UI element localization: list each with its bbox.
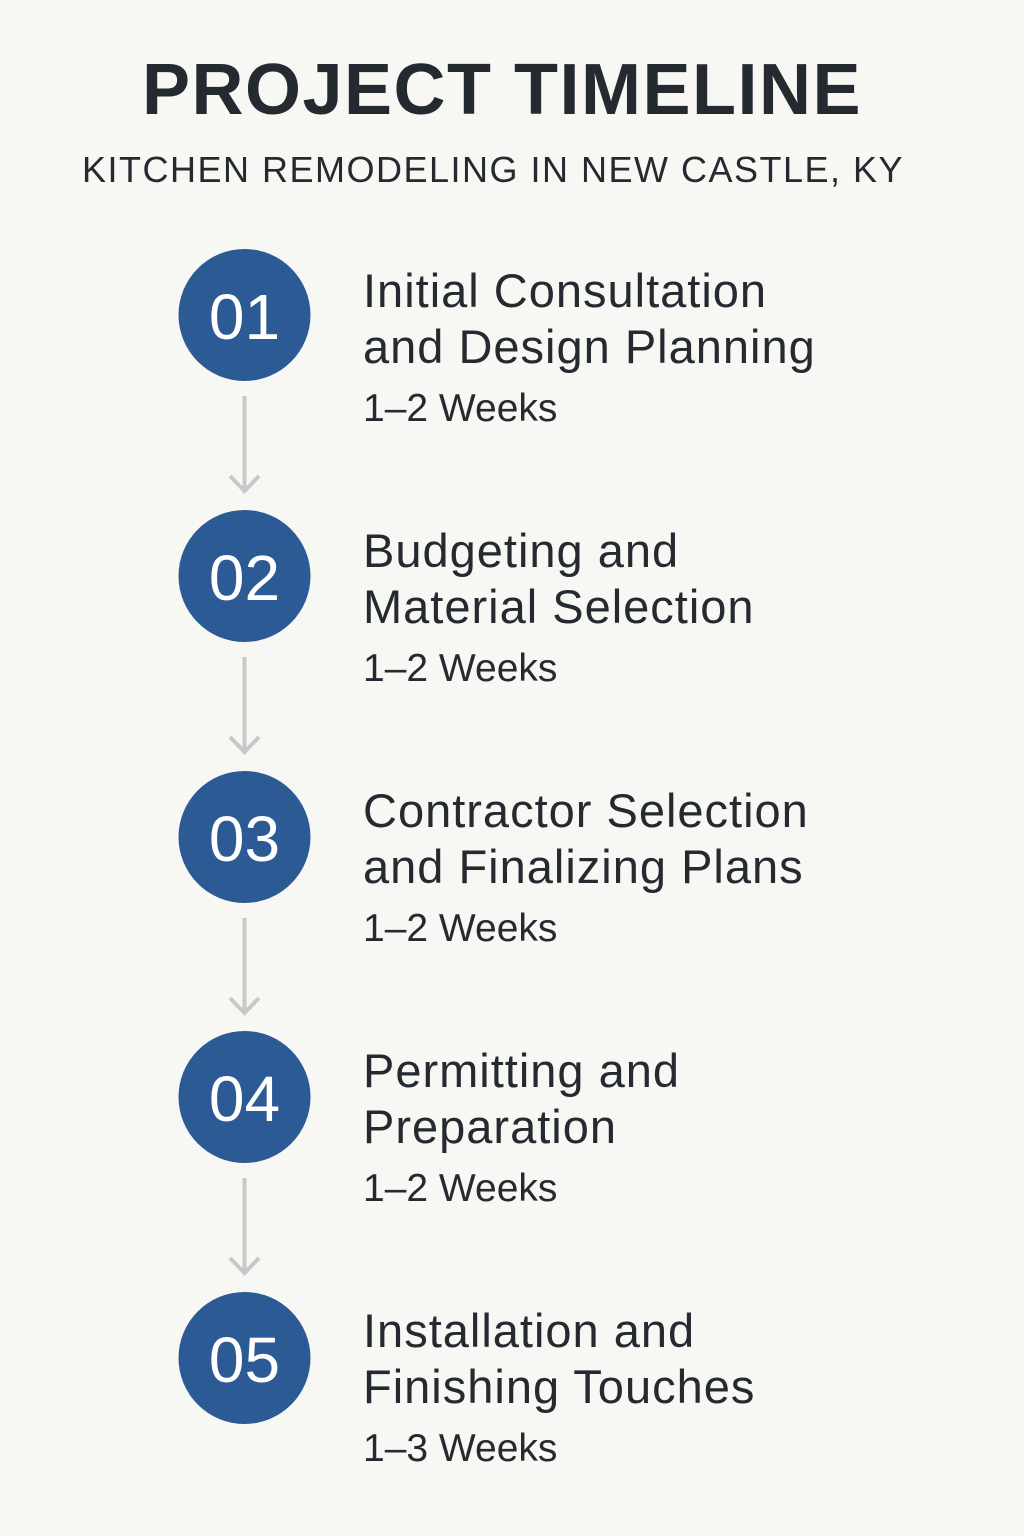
arrow 4 bbox=[230, 1178, 259, 1273]
step 05 bbox=[178, 1292, 755, 1470]
step 04: 04 bbox=[209, 1063, 280, 1135]
step 02: 02 bbox=[209, 542, 280, 614]
step 04: 1–2 Weeks bbox=[363, 1167, 557, 1210]
step 04 bbox=[178, 1031, 680, 1210]
step 01: Initial Consultation bbox=[363, 264, 767, 317]
step 04: Preparation bbox=[363, 1100, 617, 1153]
step 03: 03 bbox=[209, 803, 280, 875]
arrow 2 bbox=[230, 657, 259, 752]
step 05: 05 bbox=[209, 1324, 280, 1396]
step 02: Budgeting and bbox=[363, 524, 679, 577]
step 03: Contractor Selection bbox=[363, 784, 809, 837]
step 03 bbox=[178, 771, 809, 950]
step 01 bbox=[178, 249, 816, 430]
step 04: Permitting and bbox=[363, 1044, 680, 1097]
step 05: Installation and bbox=[363, 1304, 695, 1357]
arrow 3 bbox=[230, 918, 259, 1013]
step 01: 1–2 Weeks bbox=[363, 387, 557, 430]
step 02: 1–2 Weeks bbox=[363, 647, 557, 690]
step 02 bbox=[178, 510, 755, 690]
step 03: and Finalizing Plans bbox=[363, 840, 804, 893]
step 05: 1–3 Weeks bbox=[363, 1427, 557, 1470]
title: PROJECT TIMELINE bbox=[142, 50, 862, 130]
step 05: Finishing Touches bbox=[363, 1360, 755, 1413]
arrow 1 bbox=[230, 396, 259, 491]
step 02: Material Selection bbox=[363, 580, 755, 633]
step 01: 01 bbox=[209, 281, 280, 353]
step 03: 1–2 Weeks bbox=[363, 907, 557, 950]
step 01: and Design Planning bbox=[363, 320, 816, 373]
subtitle: KITCHEN REMODELING IN NEW CASTLE, KY bbox=[82, 149, 904, 190]
